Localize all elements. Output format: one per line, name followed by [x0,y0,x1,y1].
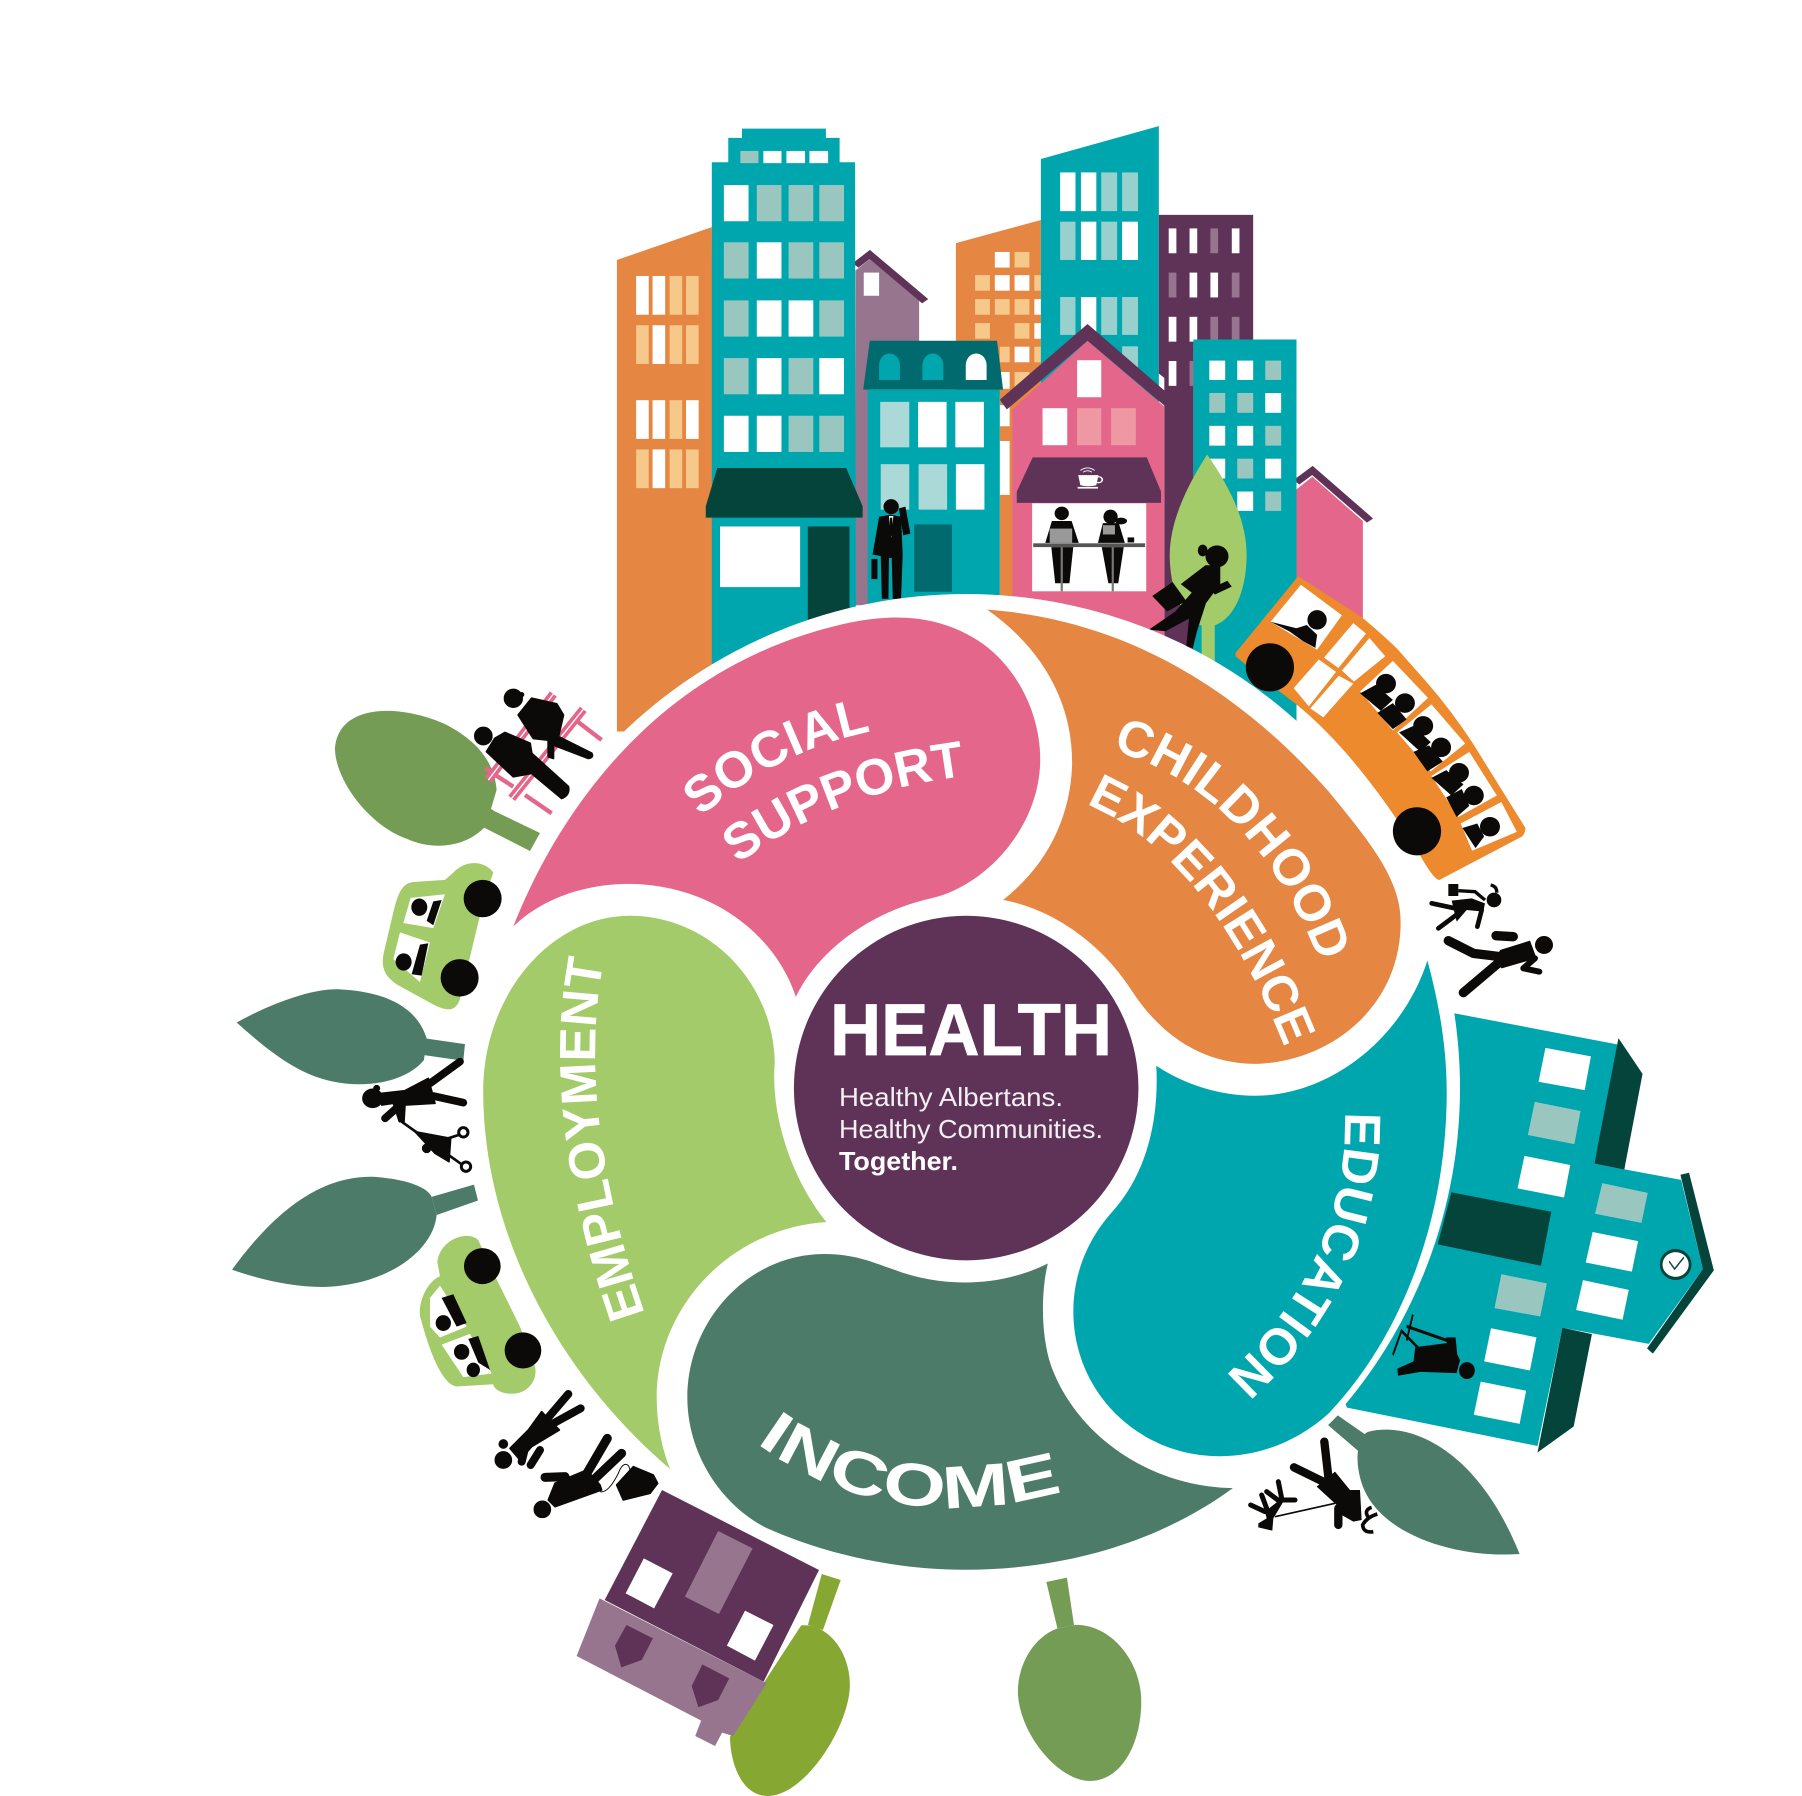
label: education: EDUCATION [1228,1116,1380,1399]
petal: employment [483,916,826,1469]
figure: mother with stroller [363,1062,471,1171]
label: social support: SUPPORT [724,741,960,859]
petal: social support [513,618,1040,997]
school building [1303,1013,1714,1452]
center tagline: Healthy Communities. [839,1114,1103,1144]
figures: adult and child walking on right [1432,884,1553,993]
globe petals [483,610,1447,1570]
vehicle: light green car lower [420,1236,541,1394]
building: teal townhouse [863,341,1003,604]
figures: person walking dog [1251,1442,1377,1532]
tree: light green behind walker [1170,454,1247,668]
building: pink house far right [1297,470,1370,630]
label: income: INCOME [760,1412,1060,1508]
tree: upper left green [335,711,540,851]
figures: two people at cafe counter [1033,507,1145,591]
tree: left dark green upper [237,989,465,1084]
figures: couple on pink bench [475,690,602,813]
center tagline: Together. [839,1146,958,1176]
petal: income [687,1254,1233,1570]
house: purple on bottom [577,1490,819,1746]
center heading: health: HEALTH [830,990,1112,1071]
building: upper right teal tower [1041,126,1159,403]
building: purple tower [1159,215,1253,656]
building: left orange tower [617,227,715,732]
city skyline buildings [617,126,1370,732]
tree: left dark green lower [232,1177,478,1287]
label: social support [684,702,960,859]
label: social support: SOCIAL [684,702,870,812]
petal: education [1073,960,1447,1456]
center tagline [839,1082,1103,1176]
tree: lower right dark green [1328,1415,1520,1555]
figures: adult and child walking with bag [495,1394,658,1517]
building: pink cafe [1000,324,1165,647]
white globe disk [472,594,1460,1582]
center circle: health [794,916,1138,1260]
icon: coffee cup with wifi [1078,468,1102,489]
figure: businessman on phone [871,499,910,599]
vehicle: orange school bus [1235,576,1525,880]
building: mauve house [856,255,925,605]
label: childhood experience: CHILDHOOD [1118,721,1346,956]
building: middle orange block [956,220,1041,601]
figure: woman walking with briefcase [1149,545,1232,648]
vehicle: light green car upper [383,863,502,1009]
petal: childhood experience [987,610,1401,1064]
center tagline: Healthy Albertans. [839,1082,1063,1112]
building: tall teal tower with shop [706,129,863,664]
icon: school clock [1660,1249,1691,1280]
figure: woman pushing cart at school [1393,1315,1475,1379]
lower left tree olive [730,1574,850,1796]
tree: bottom green [1018,1578,1141,1781]
building: right teal block [1193,340,1297,727]
label: childhood experience: EXPERIENCE [1089,774,1316,1046]
label: employment: EMPLOYMENT [560,956,644,1322]
